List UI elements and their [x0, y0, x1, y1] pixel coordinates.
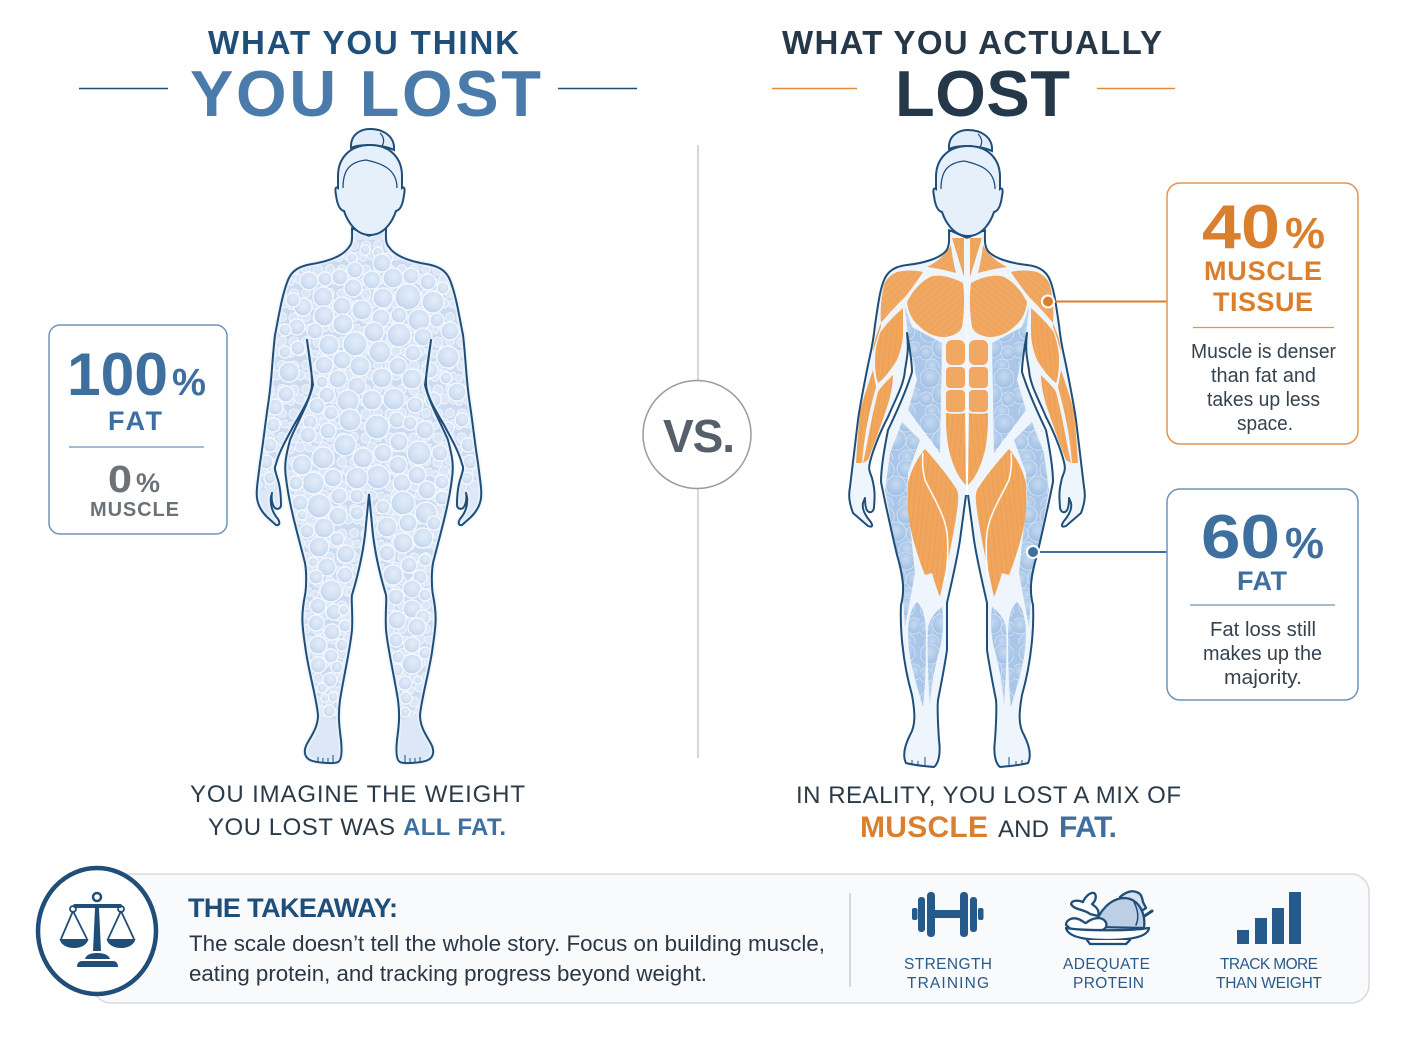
label: track more than weight: THAN WEIGHT	[1216, 975, 1323, 992]
stat: 100%: 100	[67, 341, 168, 408]
figure: actual muscle and fat body	[849, 130, 1085, 767]
fat bubbles	[255, 240, 485, 720]
callout: 60% fat	[1167, 489, 1358, 700]
vs badge: VS.	[663, 410, 735, 462]
label: muscle: MUSCLE	[90, 499, 179, 521]
label: adequate protein: PROTEIN	[1073, 975, 1144, 992]
caption: right figure: AND	[998, 816, 1049, 843]
stat: 40%: %	[1285, 209, 1325, 258]
label: adequate protein	[1063, 956, 1150, 992]
caption: right figure: MUSCLE	[860, 811, 988, 844]
stat: 40%	[1202, 193, 1325, 262]
callout: 100% fat, 0% muscle	[49, 325, 227, 534]
stat: 0%: %	[136, 468, 160, 498]
body fill	[849, 230, 1085, 767]
label: fat: FAT	[108, 406, 162, 436]
callout: 40% muscle tissue	[1167, 183, 1358, 444]
label: muscle tissue	[1204, 256, 1322, 317]
caption: right figure: IN REALITY, YOU LOST A MIX OF	[796, 782, 1181, 809]
icon: balance scale	[38, 868, 156, 994]
label: fat: FAT	[1237, 566, 1288, 596]
head	[933, 130, 1003, 236]
icon: dumbbell	[912, 892, 984, 937]
description: Muscle is denser	[1191, 341, 1336, 363]
figure: imagined all-fat body	[255, 129, 485, 763]
heading line two: YOU LOST	[190, 57, 541, 130]
heading line two: LOST	[895, 57, 1070, 130]
description: space.	[1237, 413, 1293, 435]
caption: left figure: YOU LOST WAS	[208, 814, 395, 841]
stat: 60%: %	[1285, 519, 1324, 568]
connector: fat callout	[1027, 546, 1167, 558]
description	[1203, 619, 1322, 689]
label: track more than weight: TRACK MORE	[1220, 956, 1318, 973]
caption: left figure	[190, 781, 525, 841]
heading: THE TAKEAWAY:	[188, 893, 398, 923]
panel: the takeaway	[38, 868, 1369, 1003]
title: what you actually lost	[772, 24, 1175, 130]
stat: 100%: %	[172, 362, 206, 404]
stat: 40%: 40	[1202, 193, 1280, 262]
head	[335, 129, 405, 235]
label: strength training: TRAINING	[907, 975, 989, 992]
description: takes up less	[1207, 389, 1320, 411]
stat: 60%: 60	[1201, 503, 1280, 572]
label: track more than weight	[1216, 956, 1323, 992]
icon: rising bars	[1237, 892, 1301, 944]
stat: 60%	[1201, 503, 1324, 572]
toes	[318, 755, 420, 763]
caption: left figure: ALL FAT.	[403, 814, 506, 841]
caption: right figure: FAT.	[1059, 811, 1117, 844]
description: makes up the	[1203, 643, 1322, 665]
label: muscle tissue: MUSCLE	[1204, 256, 1322, 286]
heading line one: WHAT YOU ACTUALLY	[782, 24, 1162, 61]
description: than fat and	[1211, 365, 1316, 387]
toes	[912, 757, 1022, 766]
muscle and fat regions	[856, 238, 1078, 707]
icon: protein plate	[1066, 891, 1152, 944]
body text	[189, 931, 825, 986]
label: muscle tissue: TISSUE	[1213, 287, 1313, 317]
body inner edge glow	[257, 228, 481, 763]
description: majority.	[1224, 667, 1302, 689]
heading line one: WHAT YOU THINK	[208, 24, 519, 61]
body text: eating protein, and tracking progress beyond weight.	[189, 961, 707, 986]
body outline	[849, 230, 1085, 767]
label: adequate protein: ADEQUATE	[1063, 956, 1150, 973]
body fill	[257, 228, 481, 763]
label: strength training	[904, 956, 992, 992]
connector: muscle callout	[1042, 296, 1167, 308]
title: what you think you lost	[79, 24, 637, 130]
description: Fat loss still	[1210, 619, 1316, 641]
vs badge	[643, 380, 751, 488]
body text: The scale doesn’t tell the whole story. Focus on building muscle,	[189, 931, 825, 956]
body outline	[257, 228, 481, 763]
description	[1191, 341, 1336, 435]
stat: 0%	[108, 459, 160, 501]
stat: 0%: 0	[108, 459, 132, 501]
label: strength training: STRENGTH	[904, 956, 992, 973]
caption: left figure: YOU IMAGINE THE WEIGHT	[190, 781, 525, 808]
caption: right figure	[796, 782, 1181, 844]
